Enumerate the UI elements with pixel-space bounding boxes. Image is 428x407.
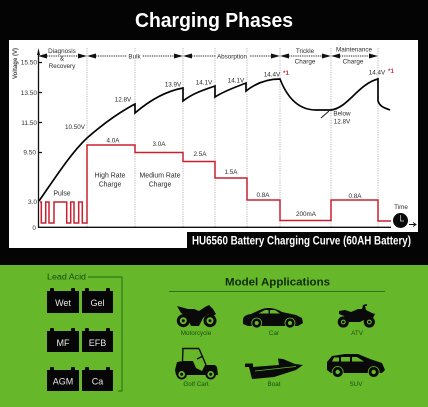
battery labels: Gel <box>90 298 105 308</box>
time label: Time <box>394 204 408 211</box>
limit markers: *1 <box>283 70 289 77</box>
application labels: SUV <box>350 381 363 388</box>
voltage labels: 12.8V <box>115 96 132 104</box>
phase labels: Charge <box>295 58 316 66</box>
application labels: Boat <box>268 381 281 388</box>
phase labels: Diagnosis <box>48 48 76 55</box>
charge labels <box>53 172 181 198</box>
current labels: 2.5A <box>194 151 207 158</box>
y axis labels <box>21 60 37 232</box>
voltage labels: 13.9V <box>165 82 182 88</box>
phase labels: Charge <box>343 58 364 66</box>
axes <box>37 48 40 55</box>
y axis labels: 15.50 <box>21 60 37 66</box>
voltage labels: 14.4V <box>264 72 281 78</box>
application labels: ATV <box>351 330 364 337</box>
icon: motorcycle <box>177 305 216 326</box>
current labels <box>107 138 362 218</box>
applications divider <box>169 290 385 292</box>
panel: battery charging curve chart <box>9 40 418 248</box>
application labels: Motorcycle <box>181 330 212 337</box>
phase boundary lines <box>87 48 378 227</box>
voltage labels <box>65 70 386 131</box>
current curve <box>40 145 391 223</box>
voltage labels: Below <box>333 110 351 118</box>
icon: golf cart <box>175 348 218 379</box>
current labels: 0.8A <box>349 193 362 200</box>
y axis labels: 3.0 <box>28 199 37 206</box>
battery icons <box>47 288 113 391</box>
panel: green applications band <box>0 265 428 407</box>
icon: suv <box>327 354 385 378</box>
charge labels: Medium Rate <box>140 172 181 180</box>
voltage labels: 14.4V <box>369 70 386 76</box>
charge labels: Charge <box>99 182 121 188</box>
title: Charging Phases <box>135 10 293 32</box>
below 12.8V pointer <box>321 111 329 118</box>
phase labels: Trickle <box>296 48 315 55</box>
y axis labels: 13.50 <box>21 90 37 97</box>
y axis labels: 9.50 <box>23 150 36 156</box>
phase arrows <box>40 55 376 57</box>
charge labels: Charge <box>149 182 171 188</box>
phase labels: Recovery <box>49 63 76 70</box>
current labels: 3.0A <box>153 141 166 148</box>
voltage labels: 12.8V <box>334 118 351 126</box>
battery labels: EFB <box>89 338 106 348</box>
current labels: 200mA <box>296 211 317 218</box>
charge labels: High Rate <box>95 172 125 180</box>
phase labels: & <box>60 56 65 62</box>
phase labels <box>48 46 373 70</box>
battery labels: Ca <box>92 376 103 386</box>
voltage labels: 10.50V <box>65 124 86 131</box>
battery labels <box>53 298 106 386</box>
icon: car <box>243 308 303 328</box>
y axis labels: 0 <box>32 225 36 232</box>
battery labels: Wet <box>55 298 71 308</box>
lead acid bracket <box>88 277 122 391</box>
applications heading: Model Applications <box>225 276 330 288</box>
phase labels: Maintenance <box>336 46 373 54</box>
current labels: 4.0A <box>107 138 120 144</box>
current labels: 1.5A <box>225 169 238 176</box>
lead acid heading: Lead Acid <box>47 272 86 282</box>
battery labels: AGM <box>53 376 73 386</box>
icon: clock and arrow <box>393 213 416 228</box>
application labels <box>181 330 364 388</box>
voltage labels: 14.1V <box>196 80 213 86</box>
limit markers <box>283 68 394 77</box>
y axis labels: 11.50 <box>21 120 37 127</box>
phase labels: Absorption <box>217 54 248 60</box>
charge labels: Pulse <box>53 190 71 198</box>
current labels: 0.8A <box>257 192 270 199</box>
application labels: Car <box>269 330 279 337</box>
application labels: Golf Cart <box>183 381 209 388</box>
limit markers: *1 <box>388 68 394 75</box>
phase labels: Bulk <box>128 54 141 60</box>
voltage labels: 14.1V <box>228 78 245 84</box>
icon: boat <box>245 358 303 379</box>
battery labels: MF <box>56 338 70 348</box>
icon: atv <box>339 304 375 326</box>
voltage curve <box>39 79 390 201</box>
y axis title: Voltage (V) <box>13 48 19 79</box>
